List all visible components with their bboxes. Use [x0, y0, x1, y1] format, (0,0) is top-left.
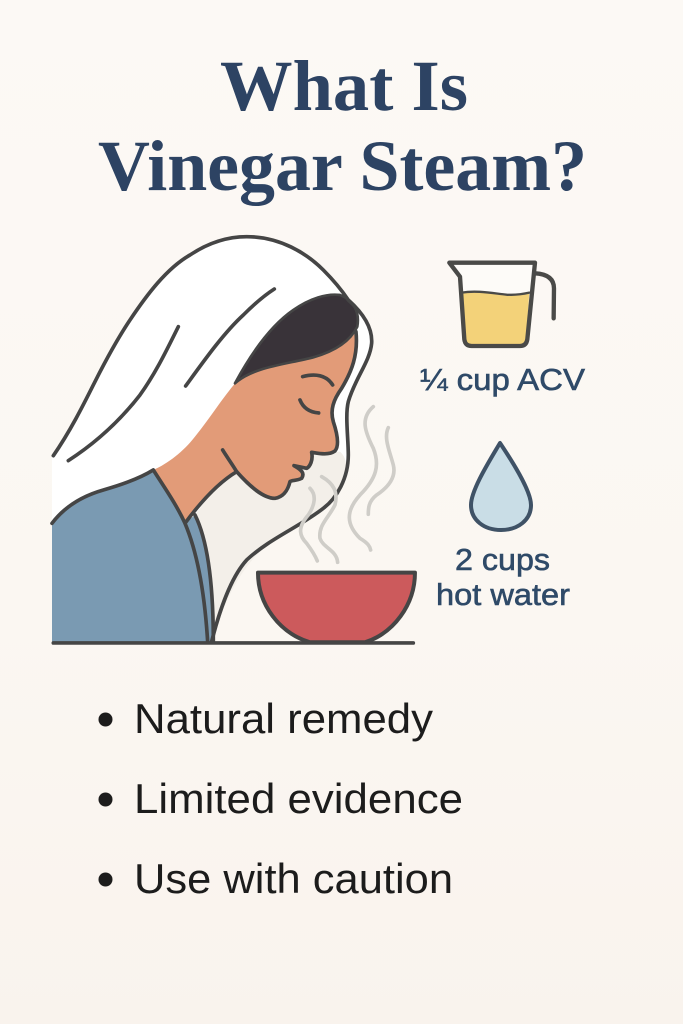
hair — [235, 295, 358, 383]
title: What Is — [220, 46, 468, 126]
bowl — [258, 573, 415, 642]
ingredient: hot water — [436, 443, 570, 612]
bullet list — [98, 695, 463, 902]
title: Vinegar Steam? — [98, 126, 587, 206]
shoulder and robe — [52, 470, 213, 642]
ingredient: apple cider vinegar — [420, 263, 585, 397]
neck and shoulder — [52, 470, 237, 642]
bullet: use with caution: Use with caution — [134, 855, 453, 902]
bullet: limited evidence: Limited evidence — [134, 775, 463, 822]
icon: water drop — [471, 443, 531, 530]
face profile — [223, 332, 356, 498]
towel outline — [53, 237, 372, 642]
bullet: natural remedy: Natural remedy — [134, 695, 433, 742]
label: water amount — [436, 542, 570, 612]
icon: measuring cup — [449, 263, 554, 346]
eyebrow — [303, 375, 333, 385]
steam — [301, 407, 394, 562]
white towel — [52, 237, 372, 642]
towel folds — [68, 289, 274, 461]
face and neck — [153, 332, 356, 523]
label: vinegar amount: ¼ cup ACV — [420, 362, 585, 397]
outlines — [52, 237, 372, 642]
label: water amount: 2 cups — [455, 542, 550, 577]
closed eye — [300, 400, 319, 413]
title — [98, 46, 587, 206]
space under chin — [195, 452, 346, 642]
table line — [53, 637, 413, 648]
illustration: woman steaming over a bowl — [52, 237, 415, 643]
label: water amount: hot water — [436, 577, 570, 612]
